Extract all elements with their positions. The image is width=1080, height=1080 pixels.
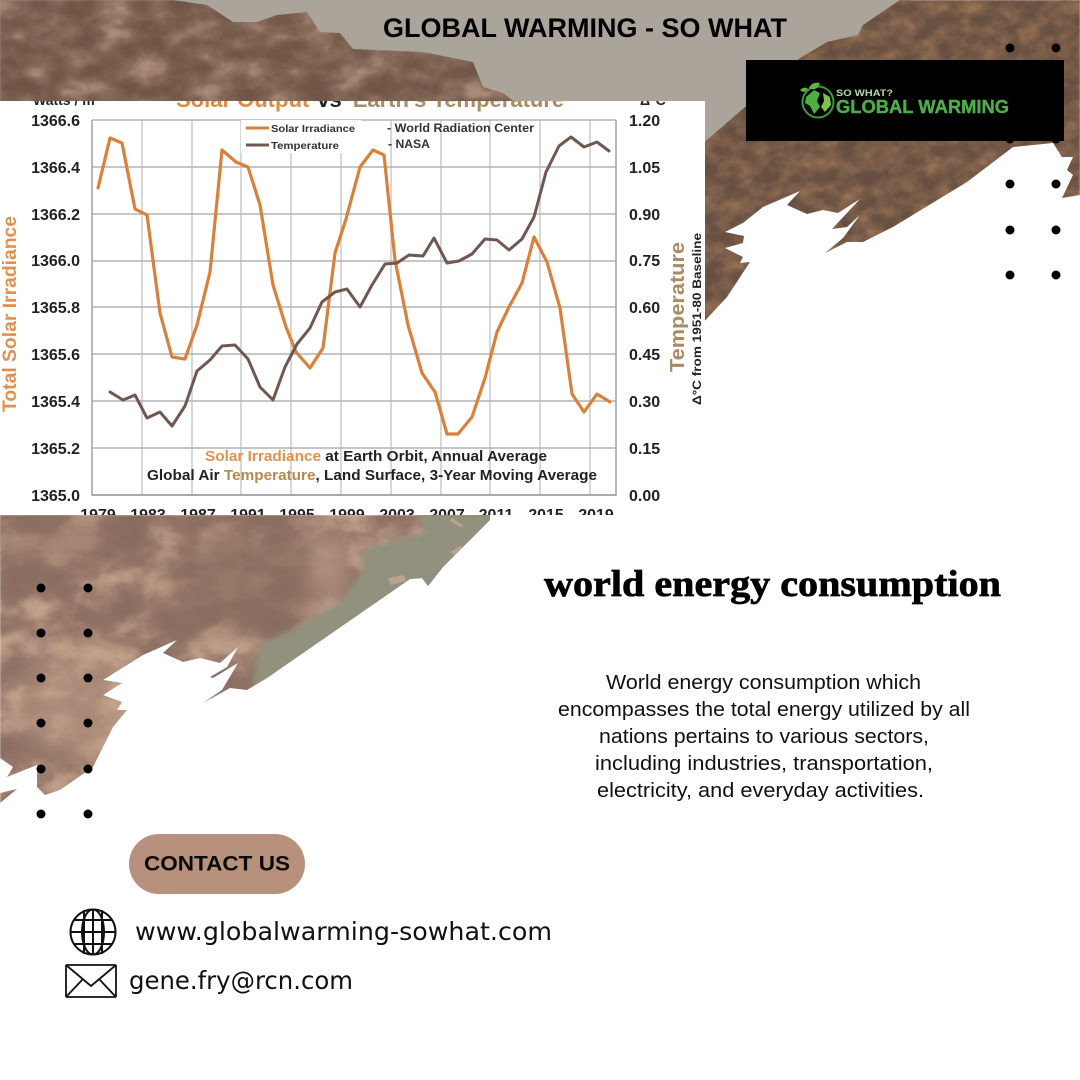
left axis labels: 1366.6 xyxy=(31,113,80,130)
logo wordmark: SO WHAT? xyxy=(836,88,893,98)
legend: Solar Irradiance xyxy=(271,123,355,135)
right axis labels xyxy=(629,113,660,505)
dot grid: top right xyxy=(1006,44,1060,280)
x axis labels: 2003 xyxy=(379,507,415,524)
right axis labels: 0.30 xyxy=(629,394,660,411)
icon: green globe with leaves xyxy=(800,83,834,118)
right axis labels: 0.45 xyxy=(629,347,660,364)
text block: description: World energy consumption which xyxy=(606,672,921,694)
left axis labels: 1365.2 xyxy=(31,441,80,458)
x axis labels: 1995 xyxy=(279,507,315,524)
text block: description: including industries, transportation, xyxy=(595,753,933,775)
temperature line xyxy=(110,137,609,426)
legend: - World Radiation Center xyxy=(387,123,535,135)
x axis labels: 2007 xyxy=(429,507,465,524)
logo panel xyxy=(746,60,1064,141)
x axis labels: 1999 xyxy=(329,507,365,524)
x axis labels: 2015 xyxy=(528,507,564,524)
logo wordmark: GLOBAL WARMING xyxy=(836,97,1009,117)
panel: chart solar output vs temperature xyxy=(0,87,705,524)
right axis labels: 1.05 xyxy=(629,160,660,177)
left axis labels: 1365.0 xyxy=(31,488,80,505)
right axis subtitle: Δ°C from 1951-80 Baseline xyxy=(690,233,704,405)
left axis labels: 1366.4 xyxy=(31,160,80,177)
dark and light rock tones xyxy=(0,515,346,760)
x axis labels xyxy=(81,509,614,515)
right unit label: Δ°C xyxy=(640,92,666,108)
right axis labels: 0.90 xyxy=(629,207,660,224)
left axis title: Total Solar Irradiance xyxy=(0,216,21,412)
x axis labels: 1987 xyxy=(180,507,216,524)
left axis labels: 1366.0 xyxy=(31,253,80,270)
left unit label: Watts / m² xyxy=(33,92,100,108)
text block: description: encompasses the total energy utilized by all xyxy=(558,699,970,721)
chart annotation: Solar Irradiance at Earth Orbit, Annual Average xyxy=(205,449,547,465)
water xyxy=(250,515,490,688)
button: contact us: CONTACT US xyxy=(144,852,290,876)
heading: world energy consumption xyxy=(544,564,1001,605)
x axis labels: 1983 xyxy=(130,507,166,524)
x axis labels: 1991 xyxy=(230,507,266,524)
icon: globe xyxy=(70,910,116,954)
left axis labels: 1365.8 xyxy=(31,300,80,317)
x axis labels: 2011 xyxy=(479,507,513,524)
left axis labels xyxy=(31,113,80,505)
panel: grey sky background xyxy=(0,0,910,145)
logo wordmark xyxy=(836,88,1009,117)
x axis labels: 1979 xyxy=(80,507,116,524)
photo: gorge bottom left xyxy=(0,510,505,810)
button: contact us xyxy=(129,834,305,894)
legend: Temperature xyxy=(271,140,339,152)
icon: envelope xyxy=(66,965,116,997)
legend xyxy=(241,120,535,153)
photo: cliff top left xyxy=(0,0,520,105)
chart title: Solar Output vs Earth's Temperature xyxy=(176,87,564,112)
photo: cliff top right xyxy=(695,0,1080,330)
right axis title: Temperature xyxy=(667,242,689,372)
email text: gene.fry@rcn.com xyxy=(129,966,353,995)
title: GLOBAL WARMING - SO WHAT xyxy=(383,13,787,43)
chart annotation xyxy=(147,449,597,484)
legend: - NASA xyxy=(388,139,430,151)
right axis labels: 0.60 xyxy=(629,300,660,317)
right axis labels: 0.15 xyxy=(629,441,660,458)
left axis labels: 1366.2 xyxy=(31,207,80,224)
right axis labels: 0.75 xyxy=(629,253,660,270)
website text: www.globalwarming-sowhat.com xyxy=(135,917,552,946)
right axis labels: 1.20 xyxy=(629,113,660,130)
chart grid xyxy=(92,120,616,495)
left axis labels: 1365.4 xyxy=(31,394,80,411)
chart annotation: Global Air Temperature , Land Surface, 3-Year Moving Average xyxy=(147,468,597,484)
left axis labels: 1365.6 xyxy=(31,347,80,364)
right axis labels: 0.00 xyxy=(629,488,660,505)
boats on water xyxy=(388,518,464,585)
x axis labels: 2019 xyxy=(578,507,614,524)
dot grid: bottom left xyxy=(36,584,92,818)
solar irradiance line xyxy=(98,138,610,434)
text block: description xyxy=(558,672,970,802)
text block: description: electricity, and everyday activities. xyxy=(597,780,924,802)
text block: description: nations pertains to various sectors, xyxy=(599,726,929,748)
